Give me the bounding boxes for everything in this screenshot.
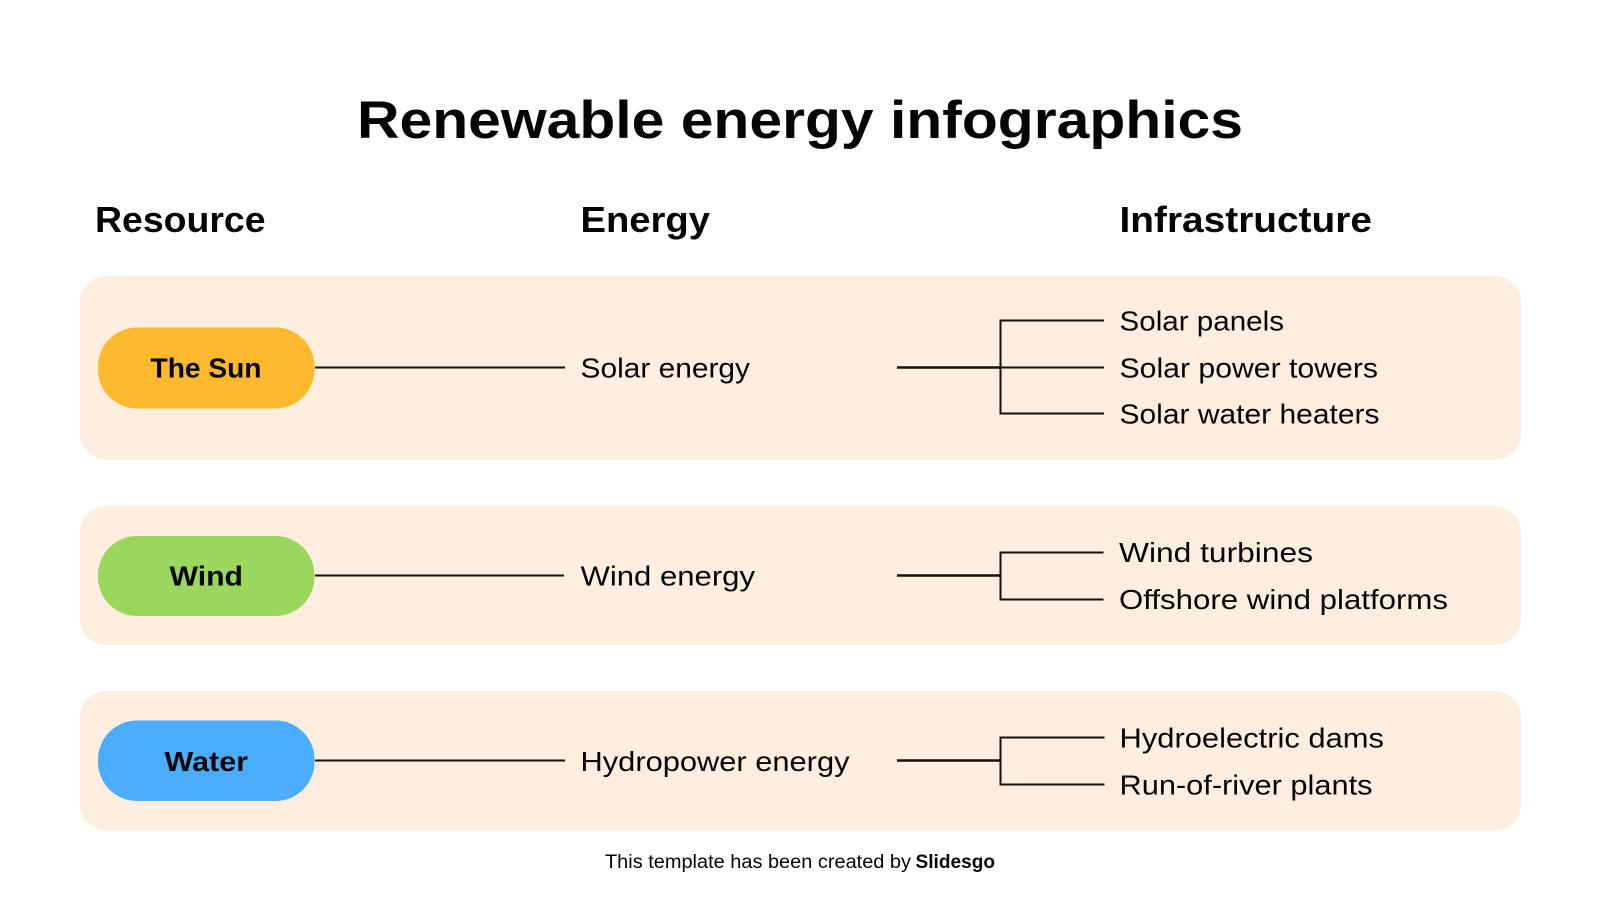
infrastructure list: solar — [1120, 306, 1380, 430]
panel: water row — [80, 691, 1521, 830]
infrastructure list: wind — [1119, 537, 1448, 615]
infrastructure list: solar: Solar water heaters — [1120, 398, 1380, 430]
infrastructure list: water: Hydroelectric dams — [1120, 722, 1384, 754]
panel: wind row — [80, 506, 1521, 645]
infrastructure list: solar: Solar panels — [1120, 306, 1284, 336]
infrastructure list: wind: Offshore wind platforms — [1119, 584, 1448, 615]
resource pill: Wind: Wind — [170, 560, 243, 592]
resource pill: The Sun — [98, 328, 314, 408]
resource pill: The Sun: The Sun — [150, 352, 262, 384]
resource pill: Wind — [98, 536, 314, 616]
resource pill: Water: Water — [164, 746, 248, 777]
bracket: water infrastructure — [897, 738, 1104, 784]
bracket: wind infrastructure — [897, 552, 1104, 600]
panel: solar row — [80, 276, 1521, 460]
column heading: Resource: Resource — [95, 199, 266, 240]
column heading: Infrastructure: Infrastructure — [1120, 199, 1372, 240]
infrastructure list: water — [1120, 722, 1384, 800]
footer credit: This template has been created by — [605, 852, 912, 873]
energy label: Hydropower energy: Hydropower energy — [580, 746, 850, 777]
column heading: Energy: Energy — [580, 199, 710, 240]
connector: sun to solar energy — [315, 366, 565, 368]
connector: water to hydropower energy — [315, 760, 565, 762]
connector: wind to wind energy — [315, 574, 564, 576]
infrastructure list: wind: Wind turbines — [1119, 537, 1313, 568]
energy label: Wind energy: Wind energy — [580, 560, 755, 592]
infrastructure list: water: Run-of-river plants — [1120, 770, 1372, 800]
footer credit: Slidesgo — [916, 852, 995, 873]
title: Renewable energy infographics — [357, 91, 1243, 150]
resource pill: Water — [98, 720, 314, 801]
infrastructure list: solar: Solar power towers — [1120, 352, 1378, 384]
energy label: Solar energy: Solar energy — [580, 352, 750, 384]
bracket: solar infrastructure — [897, 320, 1104, 414]
